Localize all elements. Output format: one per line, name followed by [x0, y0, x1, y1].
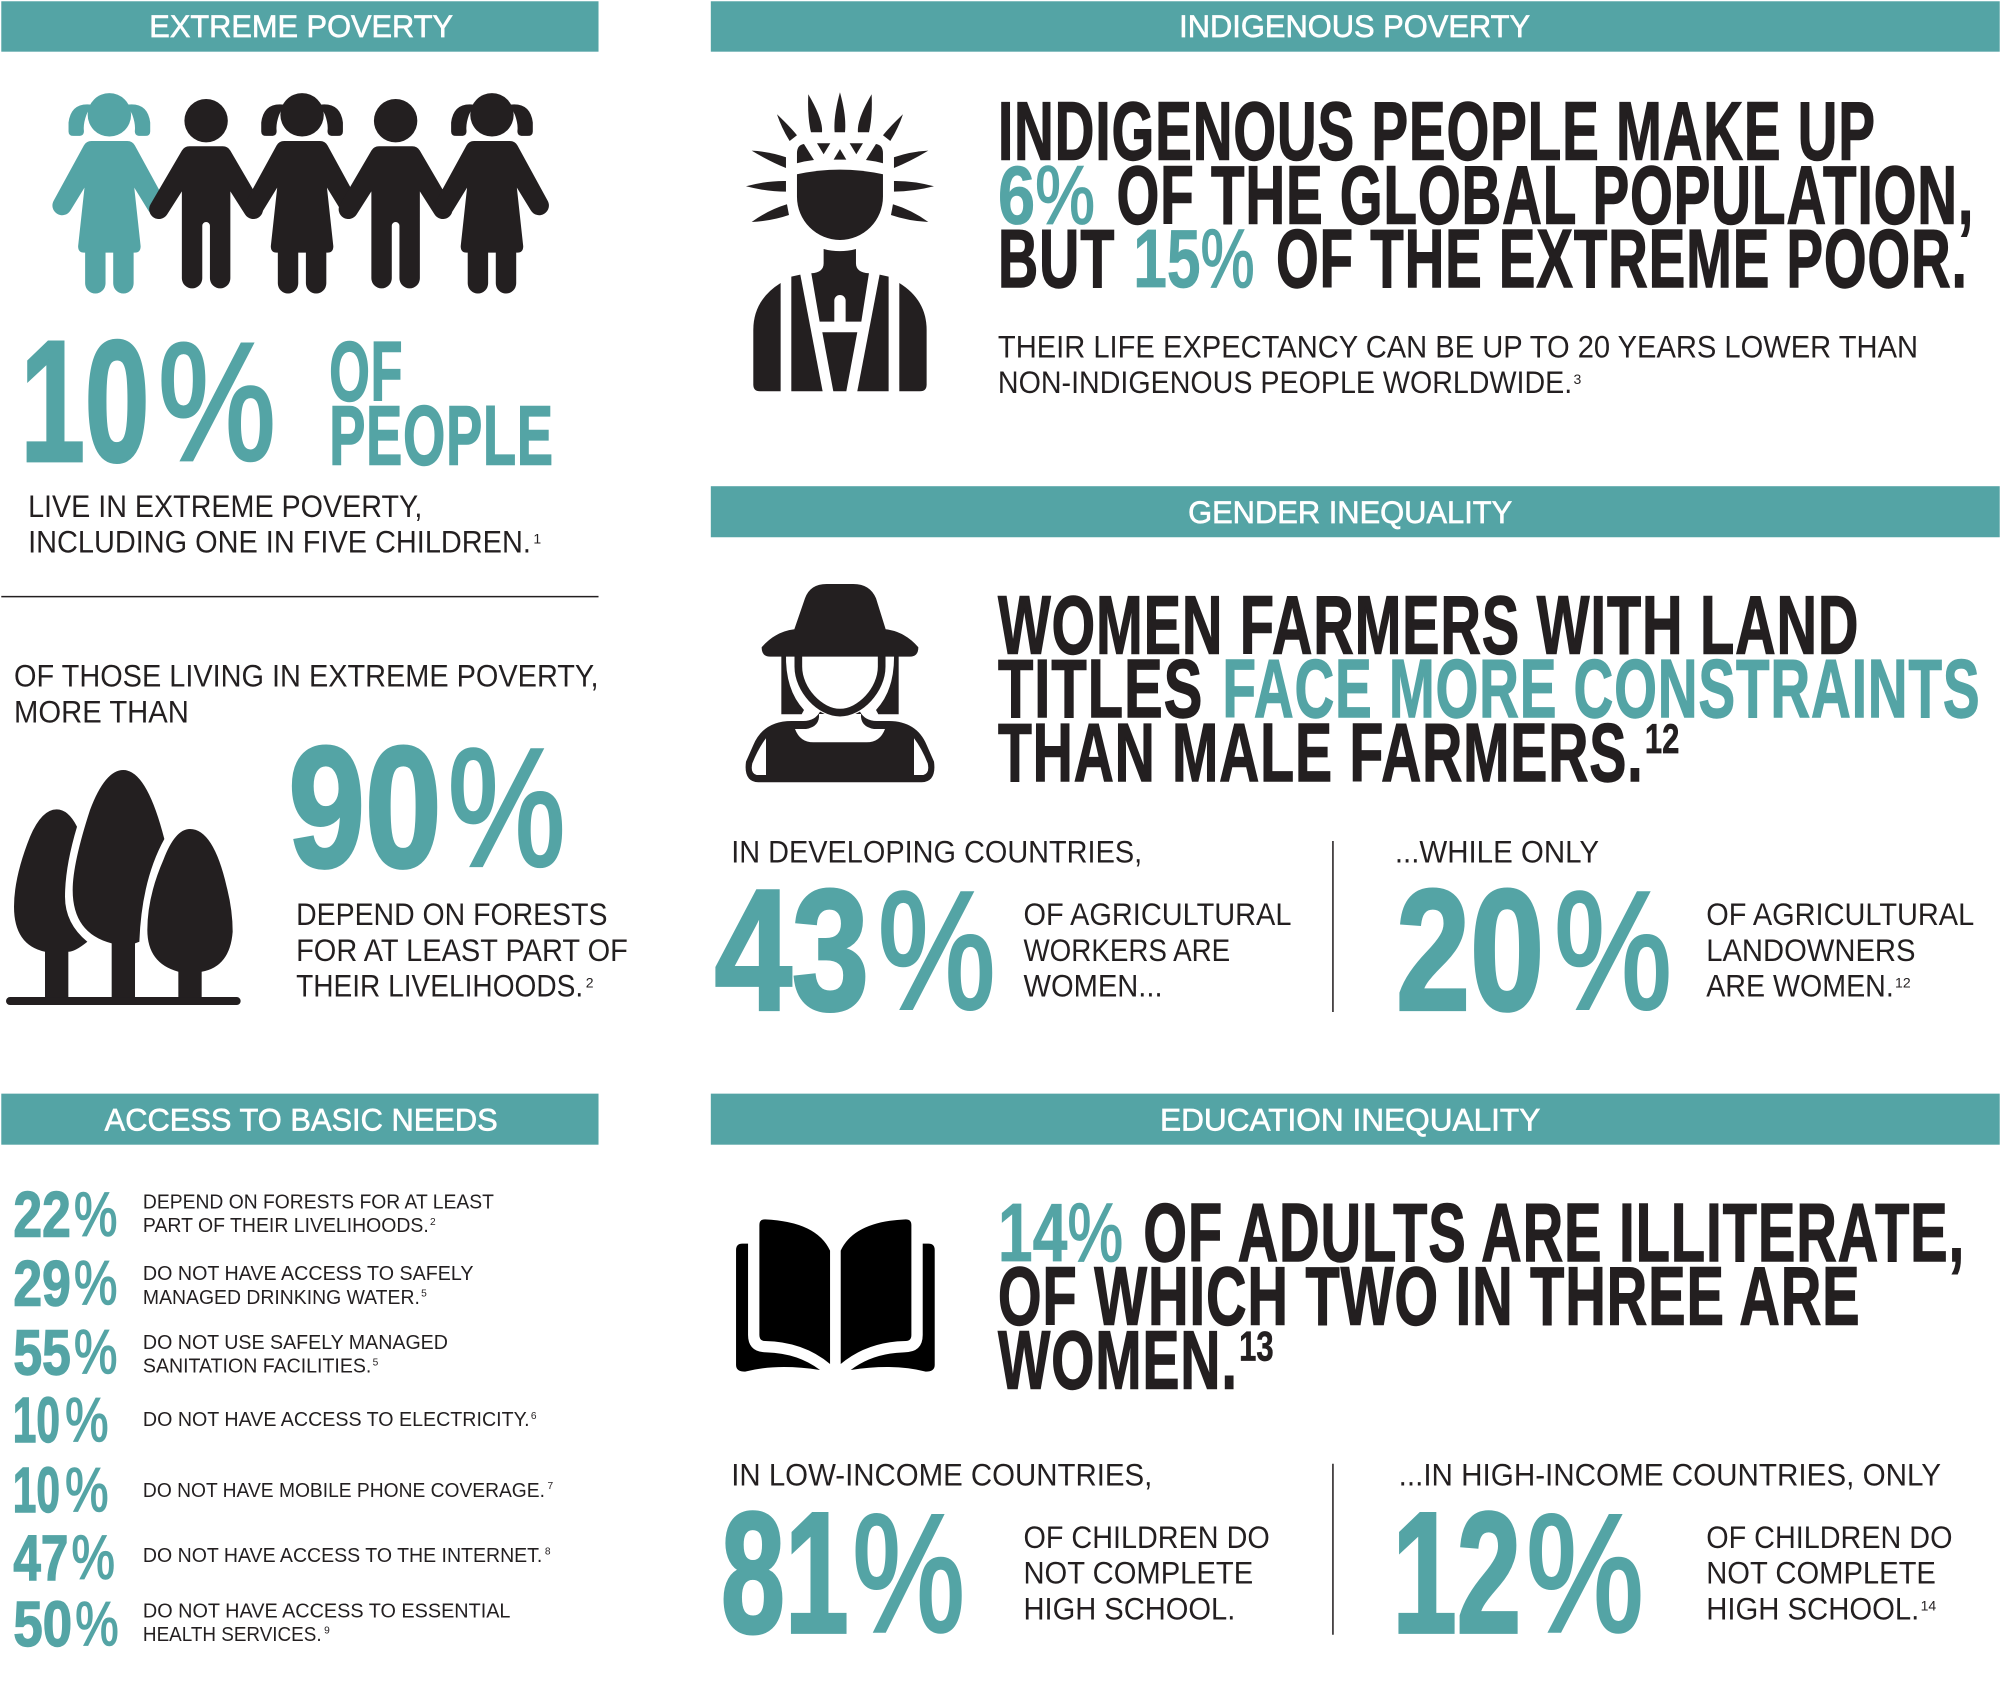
- headline: adult illiteracy: 13: [1239, 1322, 1274, 1369]
- statistic: 10% of people: OF: [329, 325, 403, 419]
- row: 22% forests: 22: [13, 1179, 71, 1251]
- statistic: 43% of agricultural workers: WOMEN...: [1023, 969, 1163, 1004]
- row: 29% drinking water: %: [74, 1248, 117, 1318]
- text: depend on forests: THEIR LIVELIHOODS.: [296, 969, 583, 1004]
- statistic: 20% of agricultural landowners: 20: [1396, 853, 1544, 1046]
- heading bar: gender inequality: GENDER INEQUALITY: [1188, 495, 1512, 530]
- row: 10% electricity: [13, 1384, 537, 1456]
- statistic: 12% in high-income countries: ...IN HIGH-INCOME COUNTRIES, ONLY: [1399, 1457, 1941, 1492]
- statistic: 20% of agricultural landowners: %: [1554, 858, 1672, 1044]
- statistic: 81% in low-income countries: %: [852, 1481, 965, 1667]
- statistic: 10% of people: %: [158, 309, 276, 495]
- statistic: 81% in low-income countries: IN LOW-INCOME COUNTRIES,: [731, 1457, 1152, 1492]
- text: of those living in extreme poverty: [14, 659, 599, 729]
- text: life expectancy: 3: [1573, 371, 1581, 387]
- statistic: 43% of agricultural workers: OF AGRICULTURAL: [1023, 897, 1291, 932]
- statistic: 81% in low-income countries: OF CHILDREN DO: [1023, 1520, 1270, 1555]
- panel: indigenous poverty: [711, 1, 2000, 400]
- heading bar: education inequality: EDUCATION INEQUALITY: [1160, 1103, 1540, 1138]
- heading bar: extreme poverty: EXTREME POVERTY: [149, 9, 453, 44]
- statistic: 12% in high-income countries: 12: [1392, 1476, 1521, 1669]
- statistic: 10% of people: PEOPLE: [329, 389, 554, 483]
- statistic: 10% of people: 10: [20, 305, 149, 498]
- statistic: 12% in high-income countries: HIGH SCHOOL.: [1706, 1591, 1919, 1626]
- row: 50% health services: HEALTH SERVICES.: [143, 1624, 322, 1646]
- heading bar: indigenous poverty: [711, 1, 2000, 52]
- statistic: 20% of agricultural landowners: LANDOWNERS: [1706, 933, 1915, 968]
- panel: extreme poverty: [1, 1, 628, 1005]
- row: 50% health services: %: [75, 1589, 119, 1659]
- text: depend on forests: [296, 897, 628, 1004]
- statistic: 10% of people: [20, 305, 554, 498]
- row: 50% health services: 50: [13, 1588, 72, 1660]
- icon: woman farmer with hat: [746, 584, 934, 782]
- text: depend on forests: 2: [586, 975, 594, 991]
- headline: adult illiteracy: WOMEN.: [998, 1313, 1238, 1406]
- row: 10% mobile phone coverage: 7: [547, 1481, 553, 1492]
- icon: five children holding hands, one highlighted: [52, 93, 549, 294]
- statistic: 90%: [288, 710, 565, 903]
- row: 10% mobile phone coverage: [13, 1454, 553, 1526]
- row: 22% forests: PART OF THEIR LIVELIHOODS.: [143, 1215, 429, 1237]
- icon: indigenous person with headdress: [746, 92, 934, 391]
- statistic: 43% of agricultural workers: WORKERS ARE: [1023, 933, 1230, 968]
- text: life expectancy: [998, 329, 1918, 400]
- row: 47% internet: DO NOT HAVE ACCESS TO THE INTERNET.: [143, 1545, 542, 1567]
- row: 55% sanitation: 5: [373, 1357, 379, 1368]
- text: live in extreme poverty: [28, 489, 541, 560]
- statistic: 43% of agricultural workers: %: [878, 858, 995, 1044]
- row: 10% mobile phone coverage: 10: [13, 1454, 60, 1526]
- headline: women farmers: THAN MALE FARMERS.: [998, 706, 1644, 799]
- statistic: 81% in low-income countries: HIGH SCHOOL.: [1023, 1591, 1235, 1626]
- text: live in extreme poverty: LIVE IN EXTREME POVERTY,: [28, 489, 422, 524]
- statistic: 20% of agricultural landowners: ARE WOMEN.: [1706, 969, 1894, 1004]
- row: 47% internet: [13, 1522, 551, 1594]
- text: live in extreme poverty: INCLUDING ONE IN FIVE CHILDREN.: [28, 525, 531, 560]
- headline: indigenous people statistic: BUT: [998, 212, 1115, 305]
- statistic: 43% of agricultural workers: IN DEVELOPING COUNTRIES,: [731, 835, 1142, 870]
- row: 47% internet: 8: [545, 1546, 551, 1557]
- heading bar: gender inequality: [711, 486, 2000, 537]
- row: 22% forests: %: [74, 1179, 117, 1249]
- statistic: 90%: 90: [288, 710, 442, 903]
- row: 55% sanitation: [13, 1316, 448, 1388]
- icon: trees: [6, 770, 241, 1005]
- heading bar: indigenous poverty: INDIGENOUS POVERTY: [1179, 9, 1530, 44]
- statistic: 12% in high-income countries: 14: [1921, 1597, 1936, 1613]
- headline: women farmers: 12: [1645, 715, 1679, 762]
- row: 55% sanitation: SANITATION FACILITIES.: [143, 1355, 371, 1377]
- row: 55% sanitation: DO NOT USE SAFELY MANAGED: [143, 1332, 448, 1354]
- text: of those living in extreme poverty: MORE THAN: [14, 694, 189, 729]
- row: 29% drinking water: [13, 1247, 473, 1319]
- row: 10% electricity: 6: [531, 1411, 537, 1422]
- row: 47% internet: 47: [13, 1522, 68, 1594]
- statistic: 90%: %: [448, 715, 565, 901]
- heading bar: education inequality: [711, 1094, 2000, 1145]
- row: 47% internet: %: [71, 1523, 115, 1593]
- headline: adult illiteracy: [998, 1186, 1965, 1406]
- row: 10% mobile phone coverage: %: [65, 1455, 108, 1525]
- row: 10% electricity: DO NOT HAVE ACCESS TO ELECTRICITY.: [143, 1409, 530, 1431]
- headline: women farmers: [998, 578, 1981, 799]
- statistic: 43% of agricultural workers: [715, 835, 1291, 1046]
- icon: open book: [736, 1219, 935, 1372]
- text: live in extreme poverty: 1: [533, 531, 541, 547]
- row: 22% forests: DEPEND ON FORESTS FOR AT LEAST: [143, 1191, 494, 1213]
- row: 55% sanitation: 55: [13, 1316, 71, 1388]
- statistic: 81% in low-income countries: 81: [721, 1476, 849, 1669]
- headline: women farmers: TITLES: [998, 642, 1203, 735]
- headline: indigenous people statistic: [998, 85, 1974, 305]
- panel: gender inequality: [711, 486, 2000, 1046]
- statistic: 81% in low-income countries: NOT COMPLETE: [1023, 1556, 1253, 1591]
- row: 55% sanitation: %: [74, 1317, 117, 1387]
- statistic: 81% in low-income countries: [721, 1457, 1270, 1669]
- row: 29% drinking water: MANAGED DRINKING WATER.: [143, 1287, 420, 1309]
- row: 22% forests: 2: [430, 1217, 436, 1228]
- row: 10% electricity: 10: [13, 1384, 60, 1456]
- row: 50% health services: 9: [324, 1625, 330, 1636]
- headline: adult illiteracy: 14%: [998, 1186, 1123, 1279]
- row: 50% health services: DO NOT HAVE ACCESS TO ESSENTIAL: [143, 1600, 510, 1622]
- row: 22% forests: [13, 1179, 494, 1251]
- heading bar: access to basic needs: ACCESS TO BASIC NEEDS: [105, 1103, 498, 1138]
- text: life expectancy: THEIR LIFE EXPECTANCY CAN BE UP TO 20 YEARS LOWER THAN: [998, 329, 1918, 364]
- statistic: 12% in high-income countries: OF CHILDREN DO: [1706, 1520, 1952, 1555]
- statistic: 20% of agricultural landowners: OF AGRICULTURAL: [1706, 897, 1974, 932]
- row: 50% health services: [13, 1588, 510, 1660]
- text: of those living in extreme poverty: OF THOSE LIVING IN EXTREME POVERTY,: [14, 659, 599, 694]
- text: depend on forests: FOR AT LEAST PART OF: [296, 933, 628, 968]
- row: 29% drinking water: 5: [421, 1289, 427, 1300]
- heading bar: extreme poverty: [1, 1, 599, 52]
- panel: education inequality: [711, 1094, 2000, 1669]
- panel: access to basic needs: [1, 1094, 599, 1660]
- statistic: 12% in high-income countries: %: [1526, 1481, 1644, 1667]
- headline: indigenous people statistic: 6%: [998, 148, 1095, 241]
- headline: indigenous people statistic: 15%: [1133, 212, 1254, 305]
- statistic: 20% of agricultural landowners: ...WHILE ONLY: [1395, 835, 1599, 870]
- row: 10% electricity: %: [65, 1385, 108, 1455]
- text: life expectancy: NON-INDIGENOUS PEOPLE WORLDWIDE.: [998, 365, 1572, 400]
- row: 10% mobile phone coverage: DO NOT HAVE MOBILE PHONE COVERAGE.: [143, 1480, 545, 1502]
- statistic: 20% of agricultural landowners: [1395, 835, 1974, 1046]
- text: depend on forests: DEPEND ON FORESTS: [296, 897, 607, 932]
- statistic: 43% of agricultural workers: 43: [715, 853, 869, 1046]
- heading bar: access to basic needs: [1, 1094, 599, 1145]
- statistic: 12% in high-income countries: NOT COMPLETE: [1706, 1556, 1936, 1591]
- row: 29% drinking water: 29: [13, 1247, 71, 1319]
- statistic: 20% of agricultural landowners: 12: [1895, 975, 1911, 991]
- statistic: 12% in high-income countries: [1392, 1457, 1952, 1669]
- row: 29% drinking water: DO NOT HAVE ACCESS TO SAFELY: [143, 1263, 473, 1285]
